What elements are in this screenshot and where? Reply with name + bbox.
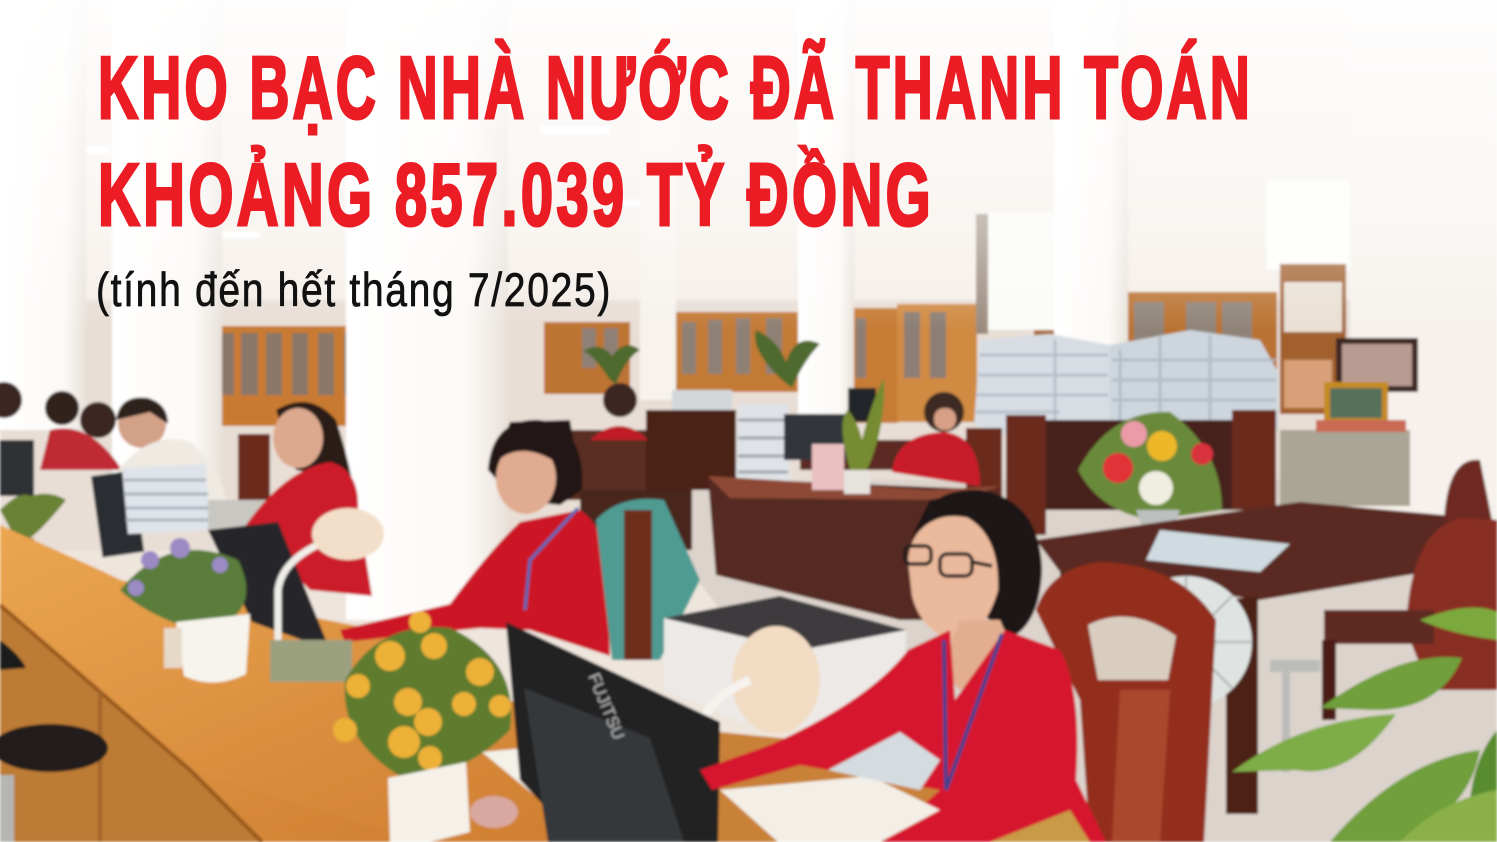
windows — [976, 180, 1350, 334]
plants back — [0, 330, 884, 562]
worker 2: woman typing — [340, 420, 700, 660]
back workers — [0, 382, 980, 500]
white fade over photo top — [0, 0, 1497, 330]
vase flowers left — [120, 538, 250, 683]
ceiling lights — [70, 126, 640, 238]
fan — [1120, 576, 1252, 842]
wall frames and safe — [1280, 264, 1418, 506]
monitor front — [506, 622, 720, 842]
worker 3: foreground woman — [700, 490, 1106, 842]
flower vase table right — [1078, 412, 1222, 548]
left counter desk — [0, 525, 700, 842]
wood surface behind foreground — [700, 730, 1100, 842]
printer and lamp — [664, 596, 906, 842]
columns — [0, 0, 1497, 620]
desk centre dark wood — [708, 476, 1000, 620]
back desks — [238, 410, 1276, 550]
right table — [1036, 502, 1497, 814]
foreground leaves — [1232, 608, 1497, 842]
worker 1: woman at column — [236, 402, 372, 596]
computer monitors back — [0, 388, 876, 558]
monitor front: FUJITSU — [584, 670, 628, 742]
chairs right — [1270, 460, 1497, 772]
bar stool — [0, 640, 108, 842]
paper pile left — [122, 464, 278, 534]
subtitle: (tính đến hết tháng 7/2025) — [96, 263, 612, 316]
yellow flowers — [333, 611, 562, 842]
paper stacks — [672, 330, 1278, 484]
chair front — [1036, 562, 1216, 842]
title — [98, 38, 1253, 244]
title line 2: KHOẢNG 857.039 TỶ ĐỒNG — [98, 145, 934, 244]
far wall cabinets — [214, 292, 1277, 426]
computer left with lamp — [208, 508, 384, 682]
